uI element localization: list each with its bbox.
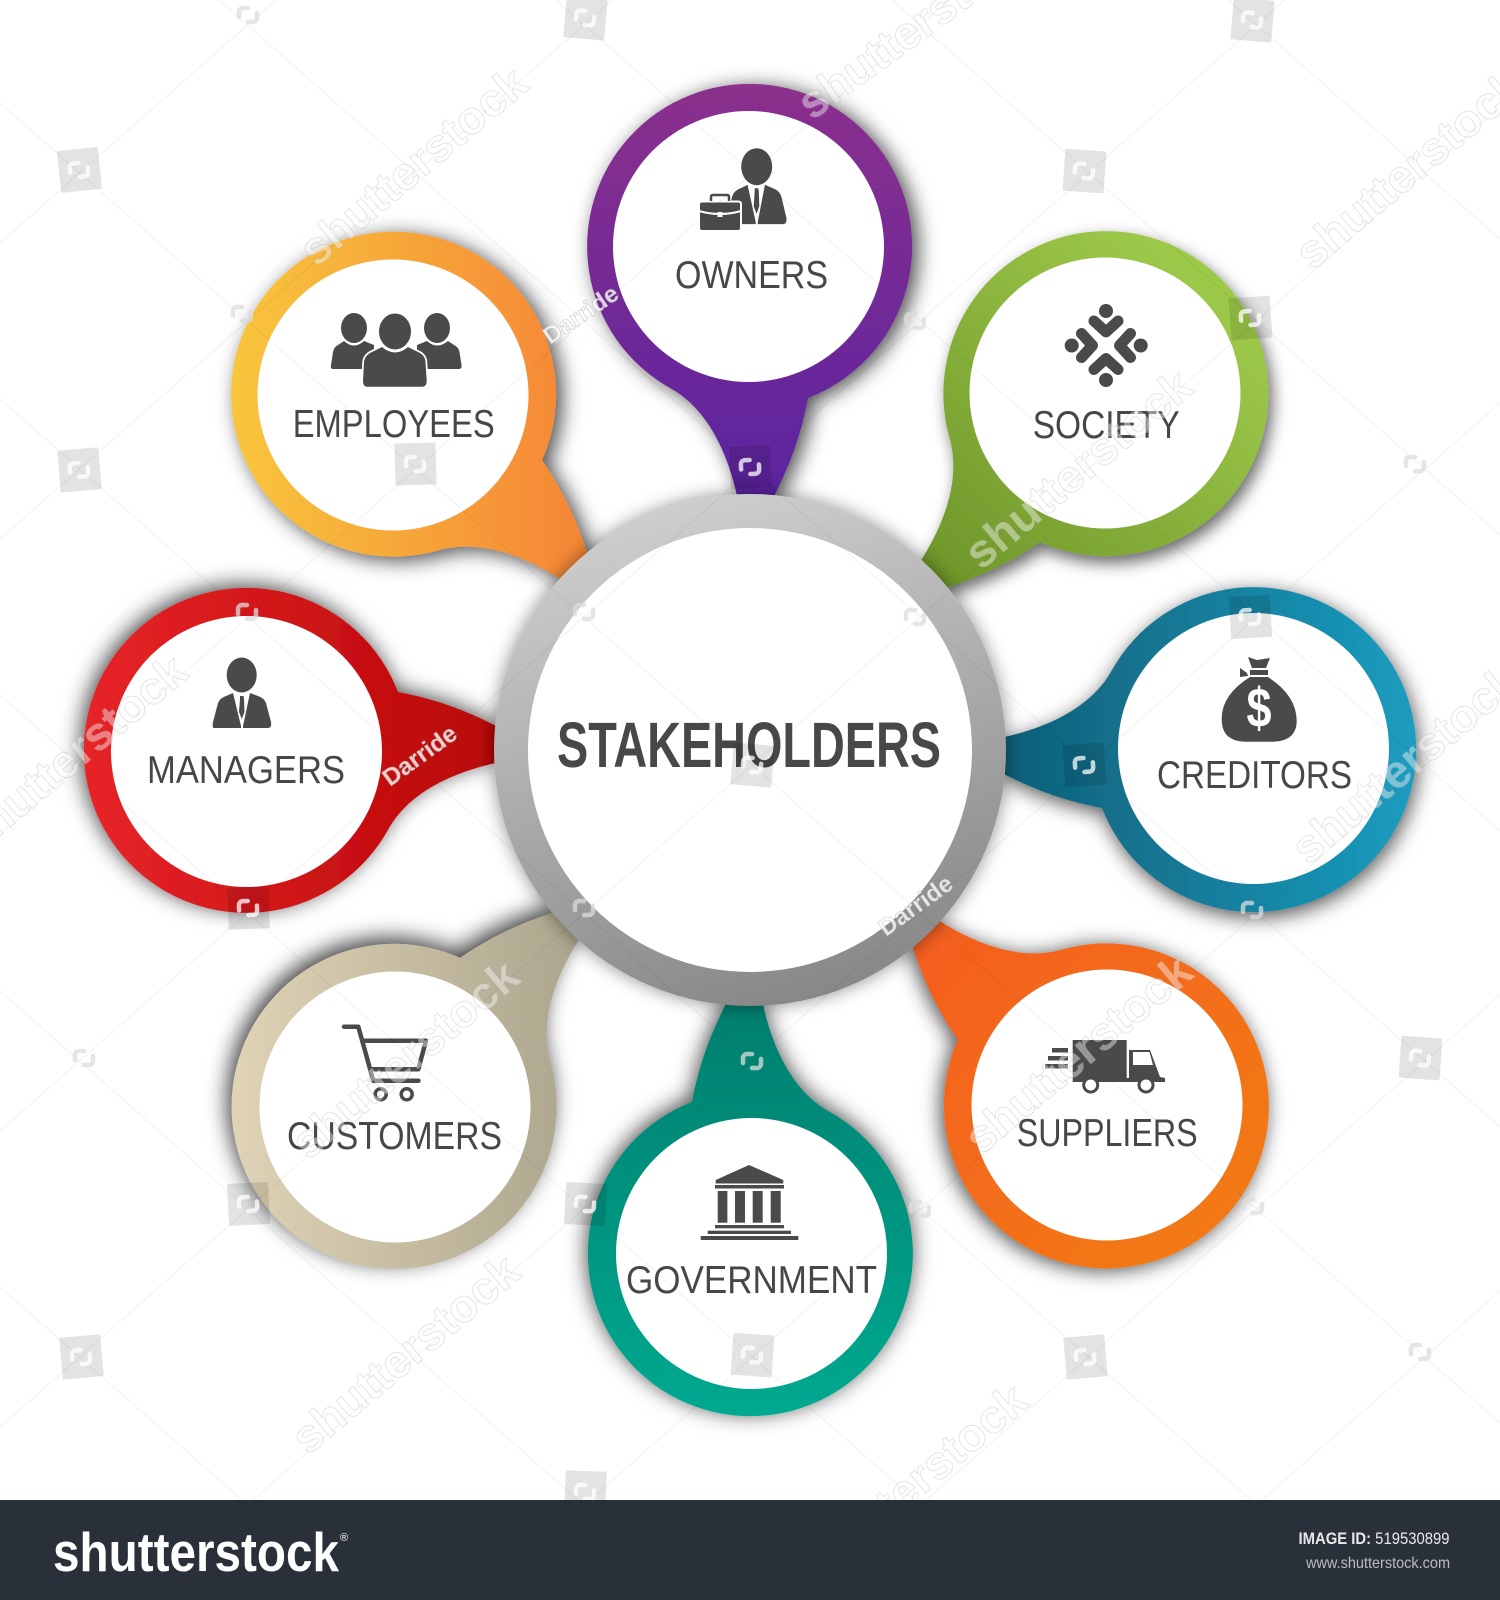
employees inner circle (258, 260, 528, 530)
panel: customers (164, 812, 688, 1336)
icon: manager (213, 658, 271, 728)
icon: shopping cart (344, 1027, 426, 1100)
watermark overlay: shutterstock (289, 56, 537, 276)
footer image id: IMAGE ID: 519530899 (1298, 1529, 1450, 1548)
icon: money bag: $ (1246, 676, 1272, 739)
employees bubble (164, 164, 688, 688)
label: managers: MANAGERS (147, 749, 345, 792)
panel: employees (164, 164, 688, 688)
footer registered mark: ® (340, 1532, 348, 1544)
icon: group of people (331, 312, 462, 387)
managers inner circle (111, 616, 382, 887)
customers inner circle (260, 972, 530, 1242)
panel: managers (84, 588, 500, 913)
society bubble (812, 164, 1336, 688)
panel: suppliers (812, 812, 1336, 1336)
label: employees: EMPLOYEES (293, 403, 495, 446)
title: STAKEHOLDERS (557, 709, 941, 781)
watermark overlay: shutterstock (954, 359, 1202, 579)
central white disc (528, 528, 972, 972)
panel: owners (587, 84, 912, 500)
label: society: SOCIETY (1033, 404, 1180, 447)
icon: four people circle (1065, 304, 1148, 387)
icon: money bag (1222, 657, 1297, 742)
footer bar (0, 1500, 1500, 1600)
footer website: www.shutterstock.com (1305, 1555, 1450, 1572)
icon: delivery truck (1045, 1040, 1165, 1092)
central grey ring (494, 494, 1006, 1006)
owners bubble (587, 84, 912, 500)
watermark overlay: shutterstock (954, 944, 1202, 1164)
label: creditors: CREDITORS (1157, 754, 1352, 797)
managers bubble (84, 588, 500, 913)
panel: creditors (1000, 587, 1416, 912)
label: suppliers: SUPPLIERS (1017, 1112, 1198, 1155)
watermark overlay: shutterstock (281, 949, 529, 1169)
creditors bubble (1000, 587, 1416, 912)
government bubble (588, 1000, 913, 1416)
panel: central stakeholders circle (494, 494, 1006, 1006)
owners inner circle (613, 111, 884, 382)
footer logo: shutterstock (53, 1521, 339, 1583)
panel: society (812, 164, 1336, 688)
watermark overlay: Darride (538, 280, 624, 350)
suppliers inner circle (972, 970, 1242, 1240)
icon: businessman with briefcase (699, 148, 787, 231)
watermark overlay: shutterstock (789, 1373, 1037, 1593)
watermark overlay: Darride (378, 720, 462, 792)
panel: government (588, 1000, 913, 1416)
government inner circle (616, 1118, 887, 1389)
society inner circle (970, 258, 1240, 528)
label: owners: OWNERS (675, 254, 828, 297)
watermark overlay: Darride (874, 870, 958, 942)
creditors inner circle (1118, 613, 1389, 884)
label: customers: CUSTOMERS (287, 1115, 502, 1158)
label: government: GOVERNMENT (626, 1259, 877, 1302)
icon: classical bank building (701, 1165, 798, 1240)
suppliers bubble (812, 812, 1336, 1336)
customers bubble (164, 812, 688, 1336)
watermark overlay: shutterstock (281, 1244, 529, 1464)
